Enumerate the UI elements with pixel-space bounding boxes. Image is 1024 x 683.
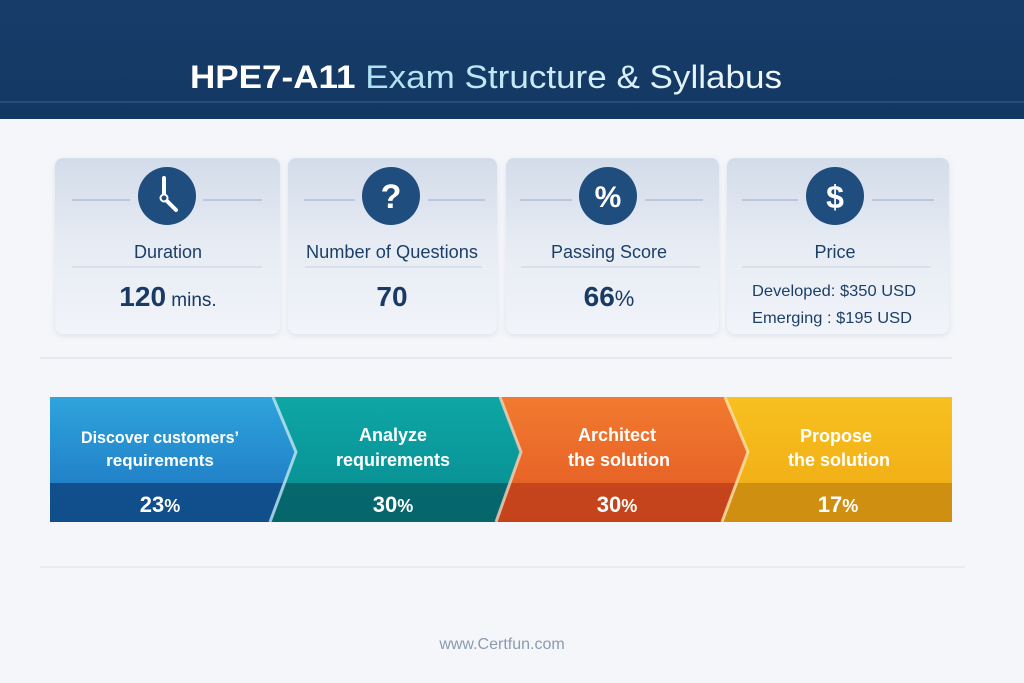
- card: questions: [288, 158, 497, 334]
- syllabus chevron band: requirements: [106, 451, 214, 470]
- syllabus chevron band: 23%: [140, 492, 180, 517]
- icon: percent: [579, 167, 637, 225]
- segment 2: [270, 397, 521, 522]
- icon: clock: [138, 167, 196, 225]
- label: Duration: [134, 242, 202, 262]
- footer url: www.Certfun.com: [438, 636, 565, 653]
- icon: question: [362, 167, 420, 225]
- value: 66%: [584, 281, 634, 312]
- syllabus chevron band: requirements: [336, 450, 450, 470]
- card: duration: [55, 158, 280, 334]
- syllabus chevron band: Architect: [578, 425, 656, 445]
- icon: dollar: [806, 167, 864, 225]
- syllabus chevron band: 30%: [373, 492, 413, 517]
- card: price: [727, 158, 949, 334]
- price lines: Developed: $350 USD: [752, 283, 916, 300]
- syllabus chevron band: Propose: [800, 426, 872, 446]
- value: 70: [376, 281, 408, 312]
- title: HPE7-A11 Exam Structure & Syllabus: [190, 59, 782, 95]
- header band: [0, 0, 1024, 119]
- label: Passing Score: [551, 242, 667, 262]
- card: price: Emerging : $195 USD: [752, 310, 912, 327]
- icon: dollar: $: [826, 179, 844, 215]
- icon: question: ?: [381, 178, 401, 216]
- label: Price: [814, 242, 856, 262]
- syllabus chevron band: the solution: [788, 450, 890, 470]
- syllabus chevron band: the solution: [568, 450, 670, 470]
- segment 1: [50, 397, 296, 522]
- card: passing score: [506, 158, 719, 334]
- syllabus chevron band: 17%: [818, 492, 858, 517]
- value: 120 mins.: [119, 281, 217, 312]
- segment 3: [496, 397, 748, 522]
- syllabus chevron band: Analyze: [359, 425, 427, 445]
- segment 4: [722, 397, 952, 522]
- icon: percent: %: [595, 181, 621, 214]
- syllabus chevron band: 30%: [597, 492, 637, 517]
- segment texts: Discover customers’: [81, 428, 239, 447]
- label: Number of Questions: [306, 242, 478, 262]
- syllabus chevron band: [50, 397, 952, 522]
